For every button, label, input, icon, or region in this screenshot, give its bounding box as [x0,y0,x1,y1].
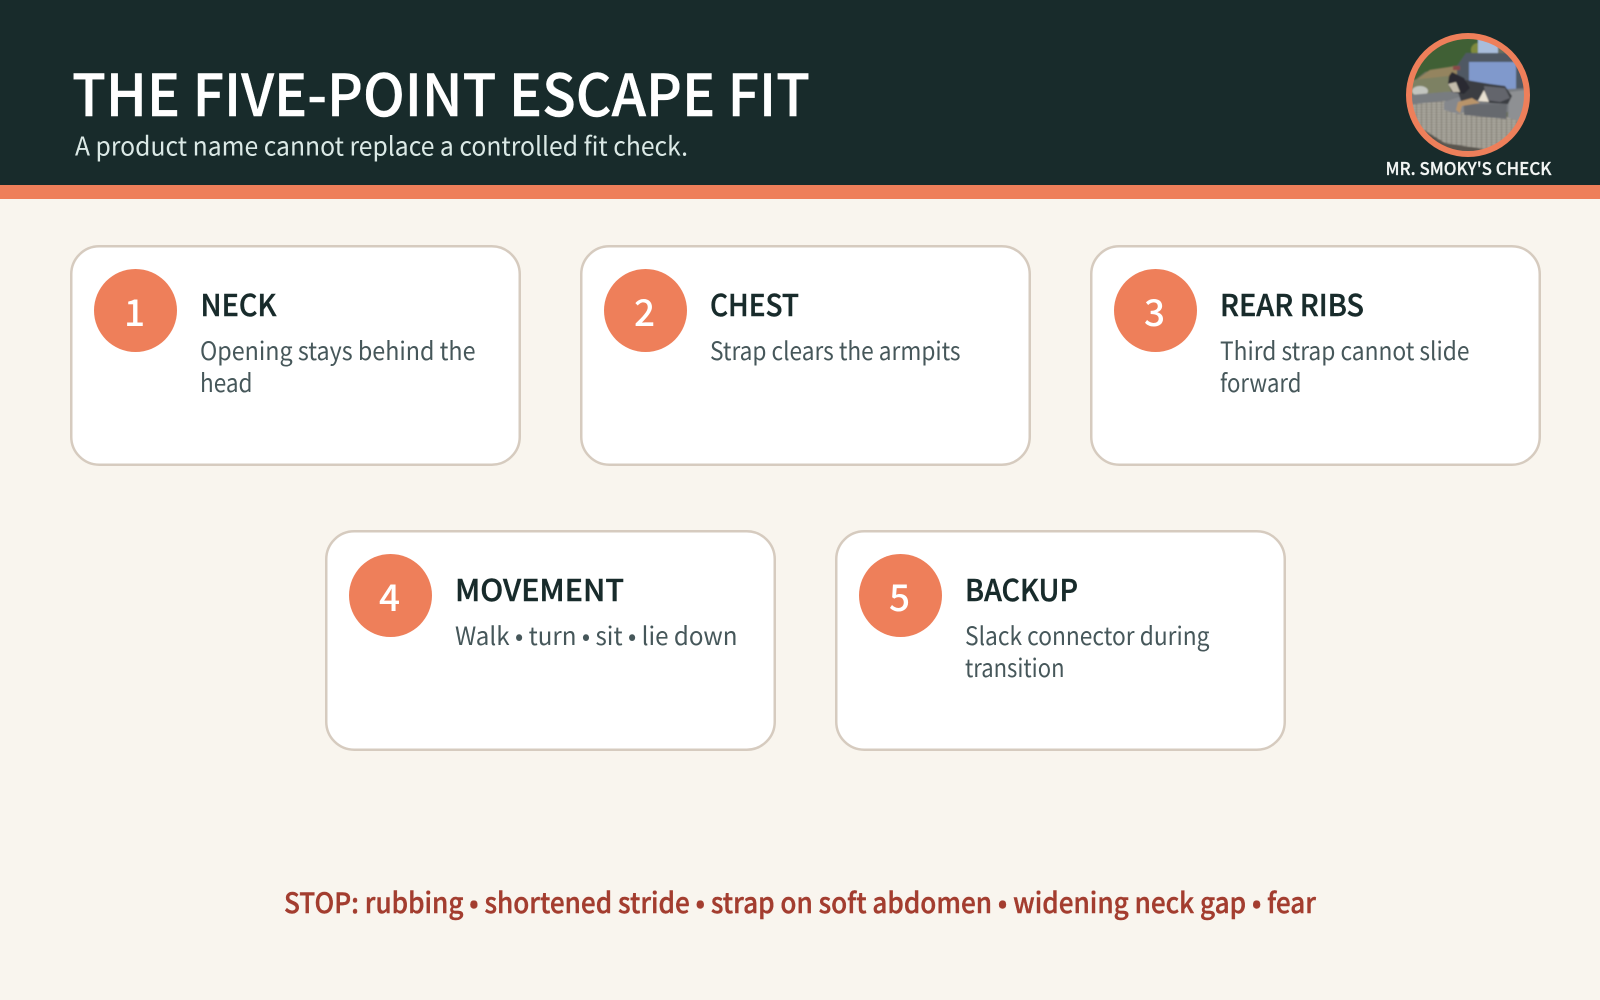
description: backup: Slack connector during [965,617,1210,653]
description: rear ribs [1220,332,1470,400]
badge 2: 2 [634,283,655,337]
photo caption: MR. SMOKY'S CHECK [1386,156,1552,181]
description: neck: head [200,364,252,400]
photo: Mr. Smoky the dog on a wicker sofa [1405,35,1531,158]
badge 1 [94,269,177,352]
description: rear ribs: forward [1220,364,1302,400]
panel: rear ribs [1091,246,1540,465]
description: rear ribs: Third strap cannot slide [1220,332,1470,368]
heading: movement: MOVEMENT [455,566,624,610]
subtitle: A product name cannot replace a controlled fit check. [75,126,688,164]
badge 3: 3 [1144,283,1165,337]
badge 4 [349,554,432,637]
description: movement: Walk • turn • sit • lie down [455,617,738,653]
heading: chest: CHEST [710,281,799,325]
panel: chest [581,246,1030,465]
title: THE FIVE-POINT ESCAPE FIT [72,49,810,133]
panel: backup [836,531,1285,750]
heading: rear ribs: REAR RIBS [1220,281,1364,325]
badge 4: 4 [379,568,400,622]
heading: backup: BACKUP [965,566,1078,610]
badge 1: 1 [124,283,145,337]
panel: movement [326,531,775,750]
header band [0,0,1600,199]
badge 5: 5 [889,568,910,622]
heading: neck: NECK [200,281,277,325]
stop warning line: STOP: rubbing • shortened stride • strap on soft abdomen • widening neck gap • fear [284,882,1316,922]
badge 3 [1114,269,1197,352]
badge 2 [604,269,687,352]
description: backup: transition [965,649,1064,685]
description: backup [965,617,1210,685]
panel: neck [71,246,520,465]
description: neck: Opening stays behind the [200,332,476,368]
badge 5 [859,554,942,637]
description: neck [200,332,476,400]
description: chest: Strap clears the armpits [710,332,960,368]
